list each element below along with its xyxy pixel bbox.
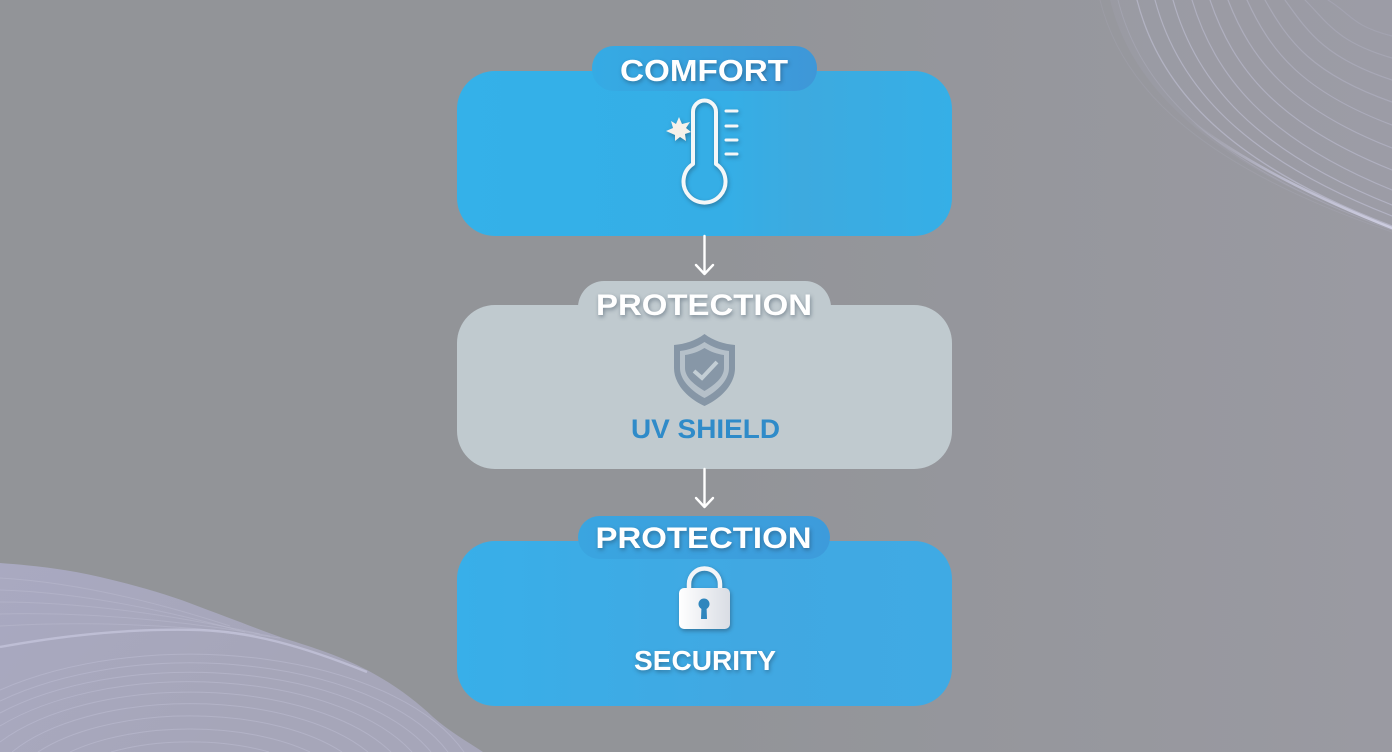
comfort heading tab (592, 46, 817, 91)
decorative wave: top right (1100, 0, 1392, 232)
security card body (457, 541, 952, 706)
shield card body (457, 305, 952, 469)
comfort heading tab: COMFORT (620, 53, 788, 88)
uv shield label: UV SHIELD (631, 414, 780, 444)
icon: thermometer (666, 101, 737, 203)
comfort card body (457, 71, 952, 236)
panel: uv shield protection (457, 281, 952, 469)
protection heading tab (578, 516, 830, 559)
protection heading tab: PROTECTION (596, 522, 812, 555)
arrow: protection to security (696, 469, 713, 507)
panel: comfort (457, 46, 952, 236)
arrow: comfort to protection (696, 236, 713, 274)
decorative wave: bottom left (0, 563, 483, 752)
icon: shield with check (674, 334, 735, 406)
icon: padlock (679, 568, 730, 629)
protection heading tab (578, 281, 831, 322)
panel: security protection (457, 516, 952, 706)
protection heading tab: PROTECTION (596, 289, 812, 322)
security label: SECURITY (634, 645, 776, 676)
